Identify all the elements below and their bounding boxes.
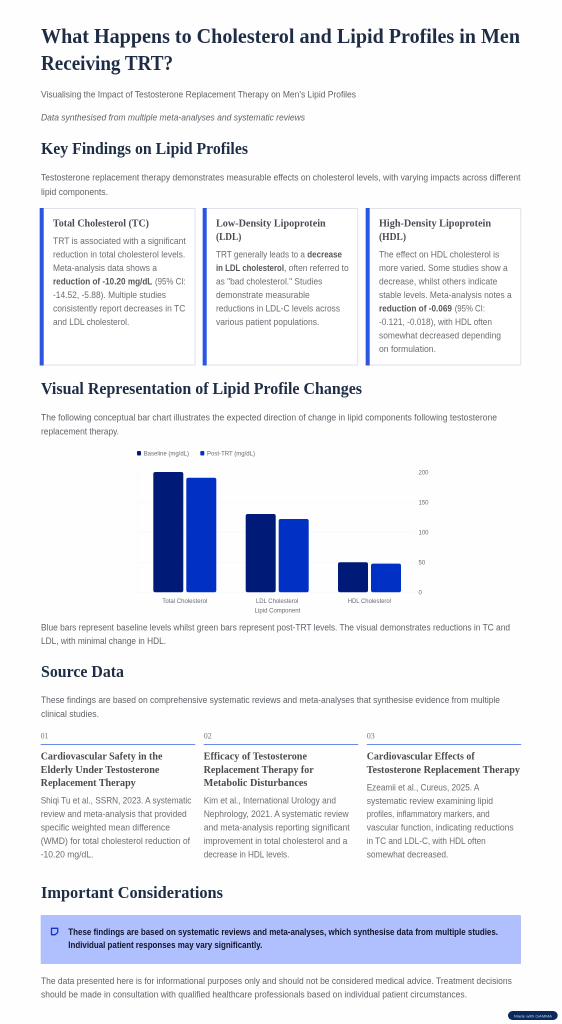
- heading: important considerations: Important Considerations: [41, 883, 223, 902]
- legend: Post-TRT (mg/dL): [207, 451, 255, 457]
- x axis labels: Total Cholesterol: [162, 599, 207, 605]
- card text: TC: reduction in total cholesterol levels.: [53, 250, 185, 260]
- source 02 title: Replacement Therapy for: [204, 765, 314, 776]
- card text: TC: (95% CI:: [155, 277, 186, 287]
- disclaimer text: should be made in consultation with qualified healthcare professionals based on individual patient circumstances.: [41, 989, 467, 999]
- chart intro text: replacement therapy.: [41, 426, 119, 436]
- source 01 text: [41, 796, 192, 859]
- x axis labels: HDL Cholesterol: [348, 599, 391, 605]
- x axis labels: LDL Cholesterol: [256, 599, 298, 605]
- source 02 text: [204, 796, 350, 859]
- card text: HDL: more varied. Some studies show a: [379, 263, 508, 273]
- callout text: [68, 927, 498, 950]
- x axis labels: Lipid Component: [255, 608, 301, 614]
- key findings intro text: [41, 172, 521, 197]
- y axis labels: 200: [418, 470, 429, 476]
- source 03 title: Cardiovascular Effects of: [367, 752, 475, 763]
- y axis labels: [418, 470, 429, 596]
- icon: note: [52, 928, 58, 935]
- card text: TC: Meta-analysis data shows a: [53, 263, 157, 273]
- y axis labels: 0: [418, 590, 423, 596]
- badge: made with genspark: Made with GAMMA: [514, 1013, 552, 1018]
- y axis labels: 150: [418, 500, 429, 506]
- bars: LDL cholesterol: [246, 514, 309, 592]
- panel: source 03: [367, 732, 521, 859]
- source 02 title: [204, 752, 314, 789]
- source 02 text: improvement in total cholesterol and a: [204, 836, 347, 846]
- bars: HDL cholesterol: [338, 562, 401, 592]
- card text: LDL: reductions in LDL-C levels across: [216, 304, 340, 314]
- source 03 title: Testosterone Replacement Therapy: [367, 765, 520, 776]
- source 02 title: Efficacy of Testosterone: [204, 752, 308, 763]
- source 01 text: -10.20 mg/dL.: [41, 849, 93, 859]
- bar chart: [137, 451, 429, 614]
- subtitle: Visualising the Impact of Testosterone Replacement Therapy on Men's Lipid Profiles: [41, 90, 356, 100]
- source 01 text: review and meta-analysis that provided: [41, 809, 187, 819]
- source 02 text: Kim et al., International Urology and: [204, 796, 336, 806]
- card heading: LDL: Low-Density Lipoprotein: [216, 219, 326, 230]
- card text: LDL: as "bad cholesterol." Studies: [216, 277, 323, 287]
- source 01 text: (WMD) for total cholesterol reduction of: [41, 836, 190, 846]
- card text: LDL: [216, 250, 349, 327]
- card text: LDL: various patient populations.: [216, 317, 319, 327]
- card text: LDL: in LDL cholesterol: [216, 263, 284, 273]
- card text: HDL: -0.121, -0.018), with HDL often: [379, 317, 492, 327]
- card text: HDL: (95% CI:: [455, 304, 485, 314]
- card heading: TC: Total Cholesterol (TC): [53, 219, 149, 230]
- chart intro text: The following conceptual bar chart illustrates the expected direction of change in lipid components following testosterone: [41, 412, 497, 422]
- card text: HDL: on formulation.: [379, 344, 436, 354]
- panel: total cholesterol: [40, 208, 195, 366]
- title: Receiving TRT?: [41, 51, 173, 75]
- source 01 text: Shiqi Tu et al., SSRN, 2023. A systematic: [41, 796, 192, 806]
- data source note: Data synthesised from multiple meta-analyses and systematic reviews: [41, 112, 305, 122]
- source 01 title: Elderly Under Testosterone: [41, 765, 160, 776]
- panel: LDL: [203, 208, 358, 366]
- disclaimer text: [41, 976, 512, 999]
- card text: LDL: demonstrate measurable: [216, 290, 310, 300]
- legend: Baseline (mg/dL): [144, 451, 189, 457]
- source 01 title: Replacement Therapy: [41, 778, 136, 789]
- panel: source 01: 01: [41, 732, 48, 740]
- chart caption: [41, 622, 510, 646]
- card text: LDL: TRT generally leads to a: [216, 250, 305, 260]
- source 02 text: and meta-analysis reporting significant: [204, 822, 350, 832]
- panel: source 02: 02: [204, 732, 212, 740]
- source 03 text: [367, 783, 514, 859]
- panel: source 02: [204, 732, 358, 859]
- callout: [41, 915, 521, 964]
- card text: TC: reduction of -10.20 mg/dL: [53, 277, 153, 287]
- y axis labels: 100: [418, 530, 429, 536]
- title: What Happens to Cholesterol and Lipid Profiles in Men: [41, 24, 520, 48]
- card heading: LDL: [216, 219, 326, 243]
- title: [41, 24, 520, 75]
- card text: HDL: decrease, whilst others indicate: [379, 277, 497, 287]
- card text: TC: [53, 236, 186, 327]
- heading: source data: Source Data: [41, 662, 124, 681]
- card heading: LDL: (LDL): [216, 232, 241, 243]
- source data intro text: [41, 695, 500, 719]
- card heading: HDL: (HDL): [379, 232, 406, 243]
- gridlines: [138, 472, 415, 592]
- source 01 text: specific weighted mean difference: [41, 822, 170, 832]
- card text: TC: -14.52, -5.88). Multiple studies: [53, 290, 166, 300]
- source 03 title: [367, 752, 520, 776]
- panel: source 01: [41, 732, 195, 859]
- callout text: These findings are based on systematic reviews and meta-analyses, which synthesise data from multiple studies.: [68, 927, 498, 937]
- panel: HDL: [366, 208, 521, 366]
- source 02 text: decrease in HDL levels.: [204, 849, 289, 859]
- source 03 text: in TC and LDL-C, with HDL often: [367, 836, 486, 846]
- panel: source 03: 03: [367, 732, 375, 740]
- card text: TC: consistently report decreases in TC: [53, 304, 186, 314]
- key findings intro text: Testosterone replacement therapy demonstrates measurable effects on cholesterol levels, with varying impacts across different: [41, 172, 521, 182]
- source 01 title: [41, 752, 163, 789]
- source 03 text: vascular function, indicating reductions: [367, 822, 514, 832]
- callout text: Individual patient responses may vary significantly.: [68, 940, 262, 950]
- legend: [137, 451, 255, 457]
- heading: key findings: Key Findings on Lipid Profiles: [41, 139, 248, 158]
- card text: HDL: [379, 250, 512, 354]
- source 03 text: profiles, inflammatory markers, and: [367, 809, 490, 819]
- card heading: HDL: High-Density Lipoprotein: [379, 219, 491, 230]
- badge: made with genspark: [508, 1011, 558, 1020]
- bars: total cholesterol: [153, 472, 216, 592]
- source data intro text: These findings are based on comprehensive systematic reviews and meta-analyses that synthesise evidence from multiple: [41, 695, 500, 705]
- x axis labels: [162, 599, 391, 614]
- source 02 text: Nephrology, 2021. A systematic review: [204, 809, 349, 819]
- card heading: HDL: [379, 219, 491, 243]
- chart caption: Blue bars represent baseline levels whilst green bars represent post-TRT levels. The visual demonstrates reductions in TC and: [41, 622, 510, 632]
- y axis labels: 50: [418, 560, 426, 566]
- disclaimer text: The data presented here is for informational purposes only and should not be considered medical advice. Treatment decisions: [41, 976, 512, 986]
- chart intro text: [41, 412, 497, 436]
- card text: TC: and LDL cholesterol.: [53, 317, 129, 327]
- source data intro text: clinical studies.: [41, 709, 99, 719]
- card text: LDL: , often referred to: [284, 263, 349, 273]
- card text: HDL: reduction of -0.069: [379, 304, 452, 314]
- source 02 title: Metabolic Disturbances: [204, 778, 307, 789]
- source 03 text: Ezeamii et al., Cureus, 2025. A: [367, 783, 479, 793]
- card text: TC: TRT is associated with a significant: [53, 236, 186, 246]
- chart caption: LDL, with minimal change in HDL.: [41, 636, 166, 646]
- card text: HDL: somewhat decreased depending: [379, 330, 501, 340]
- source 01 title: Cardiovascular Safety in the: [41, 752, 163, 763]
- source 03 text: systematic review examining lipid: [367, 796, 493, 806]
- card text: HDL: stable levels. Meta-analysis notes a: [379, 290, 512, 300]
- source 03 text: somewhat decreased.: [367, 849, 448, 859]
- heading: visual representation: Visual Representation of Lipid Profile Changes: [41, 379, 362, 398]
- card text: LDL: decrease: [307, 250, 342, 260]
- card text: HDL: The effect on HDL cholesterol is: [379, 250, 500, 260]
- key findings intro text: lipid components.: [41, 187, 108, 197]
